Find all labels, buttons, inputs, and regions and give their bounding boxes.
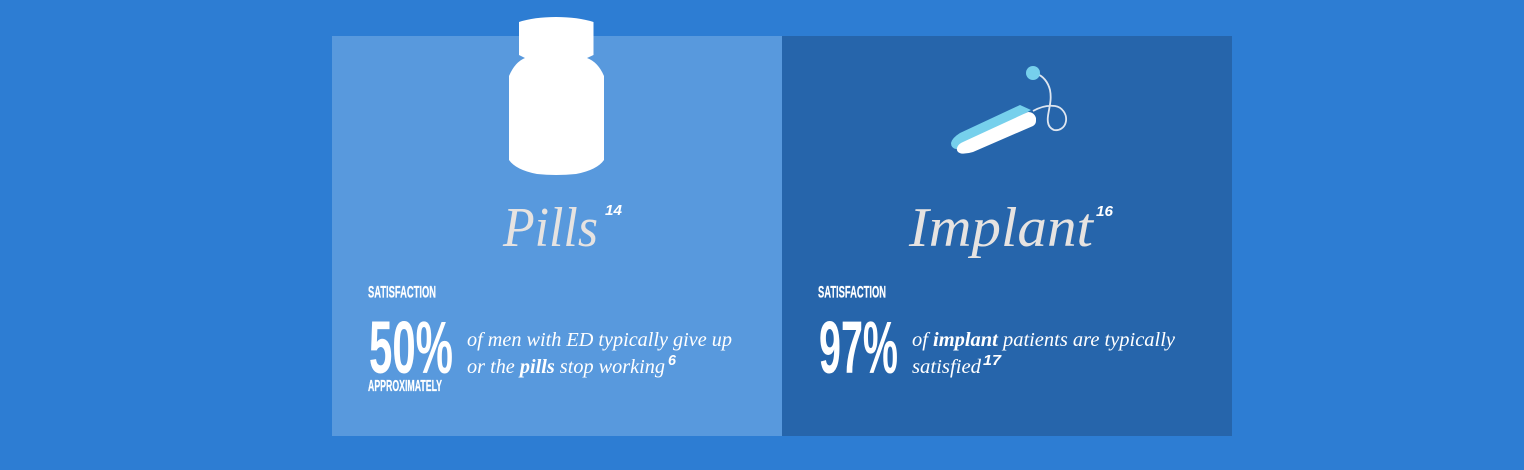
- icon: pill bottle: [509, 17, 604, 175]
- heading: pills: 14: [605, 203, 622, 219]
- heading: implant: Implant: [908, 197, 1095, 259]
- panel: pills: [332, 17, 782, 436]
- icon: implant device: [951, 66, 1066, 154]
- stat: 97 percent: 97%: [819, 306, 898, 389]
- heading: pills: Pills: [502, 197, 598, 259]
- text block: implant description: 17: [983, 353, 1002, 369]
- text block: implant description: [912, 329, 1176, 378]
- label: satisfaction: SATISFACTION: [368, 284, 436, 302]
- heading: implant: 16: [1096, 204, 1114, 220]
- panel: implant: [782, 36, 1232, 436]
- label: approximately: APPROXIMATELY: [368, 378, 442, 395]
- label: satisfaction: SATISFACTION: [818, 284, 886, 302]
- stat: 50 percent: 50%: [369, 306, 453, 389]
- text block: pills description: of men with ED typically give up: [467, 329, 732, 351]
- text block: pills description: 6: [668, 353, 677, 369]
- text block: implant description: satisfied: [912, 356, 982, 378]
- text block: implant description: of implant patients are typically: [912, 329, 1176, 351]
- text block: pills description: [467, 329, 732, 378]
- text block: pills description: or the pills stop working: [467, 356, 665, 378]
